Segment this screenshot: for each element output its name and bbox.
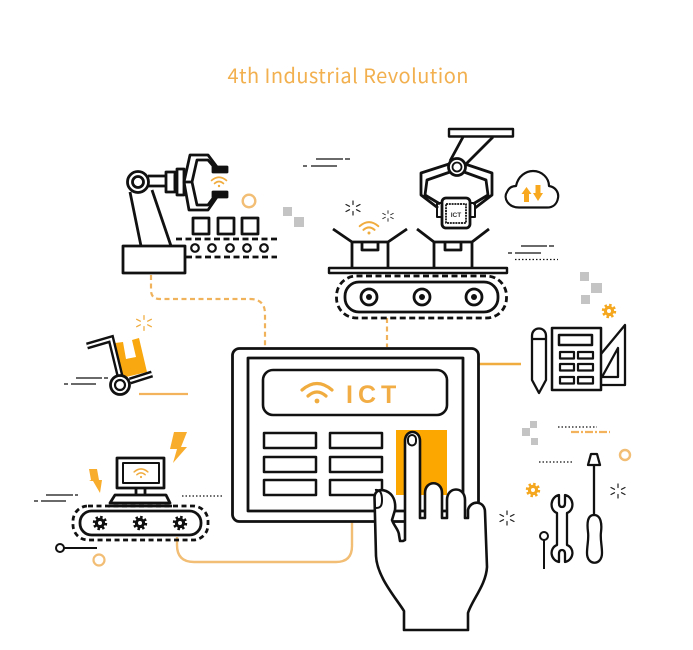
dotted line computer [182, 495, 222, 497]
sparkles lower [500, 484, 625, 525]
belt [176, 239, 277, 257]
ICT header panel [263, 370, 447, 415]
grey squares [283, 207, 304, 227]
hand truck with box [87, 338, 152, 394]
grey squares lower [522, 421, 538, 445]
orange ring [94, 554, 104, 566]
ceiling gripper with ICT chip [421, 129, 513, 228]
pencil [532, 328, 546, 393]
wrench [552, 495, 572, 562]
orange gear lower [527, 484, 539, 496]
wifi on computer [134, 469, 148, 478]
speed lines right [508, 246, 554, 253]
computer on conveyor [73, 458, 208, 540]
product boxes [193, 218, 258, 234]
lightning icons [89, 432, 187, 493]
screwdriver [587, 454, 602, 563]
menu cells [264, 433, 382, 495]
conveyor with boxes [329, 229, 507, 318]
wifi icon large [302, 384, 332, 403]
ICT label: ICT [346, 381, 401, 409]
wifi over box [360, 222, 378, 234]
connector: robot arm to tablet [151, 275, 265, 346]
orange selected button [396, 430, 447, 495]
speed lines top [303, 159, 350, 166]
set square [601, 325, 625, 385]
hand [374, 432, 487, 630]
speed lines trolley [64, 378, 108, 384]
sparkle icons [346, 201, 393, 221]
orange gear [603, 305, 615, 317]
orange ring [620, 450, 630, 460]
robot arm assembly [123, 155, 304, 273]
sparkle [137, 316, 151, 330]
connector: computer conveyor to tablet [177, 522, 352, 562]
pin connector [56, 544, 97, 552]
orange ring [243, 195, 255, 207]
speed lines computer [34, 495, 78, 501]
connector: conveyor to tablet [386, 318, 388, 347]
cloud upload download icon [506, 171, 558, 208]
connector: tablet to calculator [479, 363, 521, 365]
tablet [232, 348, 478, 522]
dotted line [515, 258, 558, 260]
pin [540, 532, 548, 569]
wifi icon [212, 177, 226, 187]
dotted and orange dashes [539, 427, 610, 462]
calculator [552, 328, 601, 390]
title: 4th Industrial Revolution [228, 60, 468, 89]
chip label: ICT [451, 212, 461, 219]
robot arm [123, 155, 227, 273]
grey squares right [580, 272, 602, 304]
orange underline [139, 393, 188, 395]
